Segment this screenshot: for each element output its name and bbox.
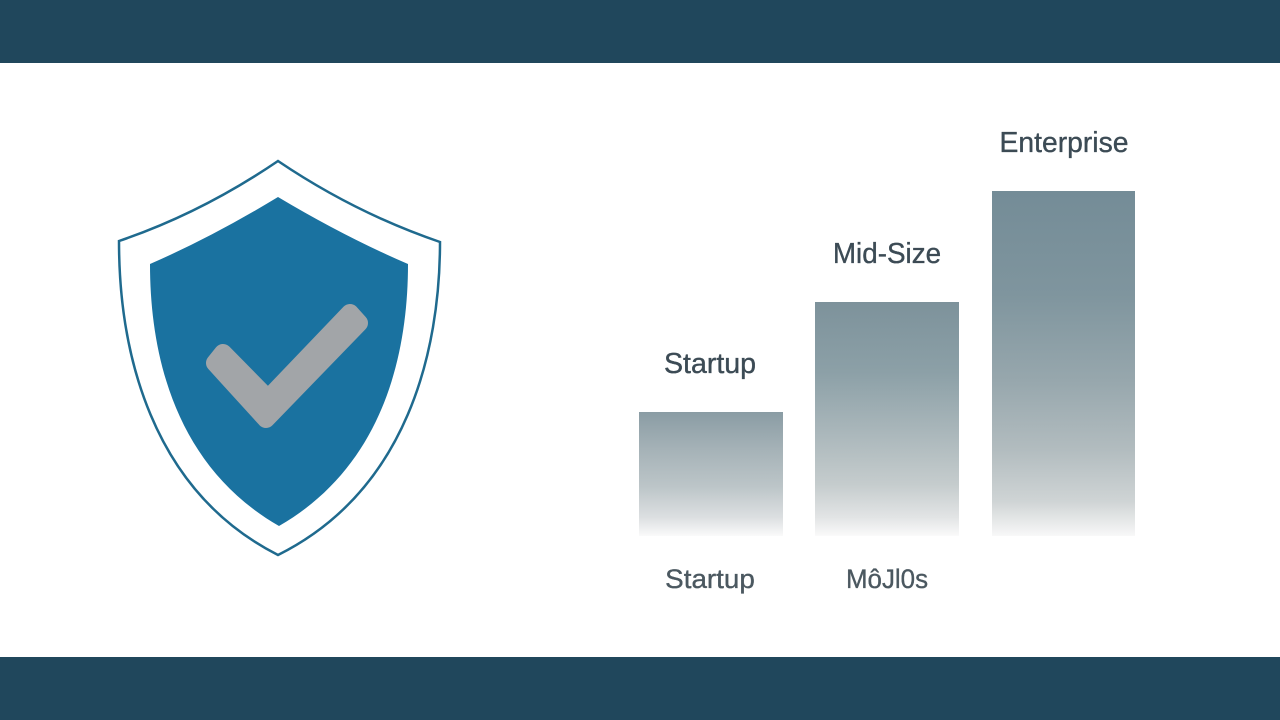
label: startup above bar: Startup <box>664 348 756 380</box>
label: mid-size: Mid-Size <box>833 238 941 270</box>
axis label: millions: MôJl0s <box>846 564 928 594</box>
label: enterprise: Enterprise <box>1000 127 1128 159</box>
bar chart <box>639 127 1135 594</box>
bottom banner <box>0 657 1280 720</box>
bar: enterprise <box>992 191 1135 536</box>
icon: shield with check mark <box>118 160 442 556</box>
axis label: startup: Startup <box>665 564 755 594</box>
bar: mid-size <box>815 302 959 536</box>
top banner <box>0 0 1280 63</box>
bar: startup <box>639 412 783 536</box>
